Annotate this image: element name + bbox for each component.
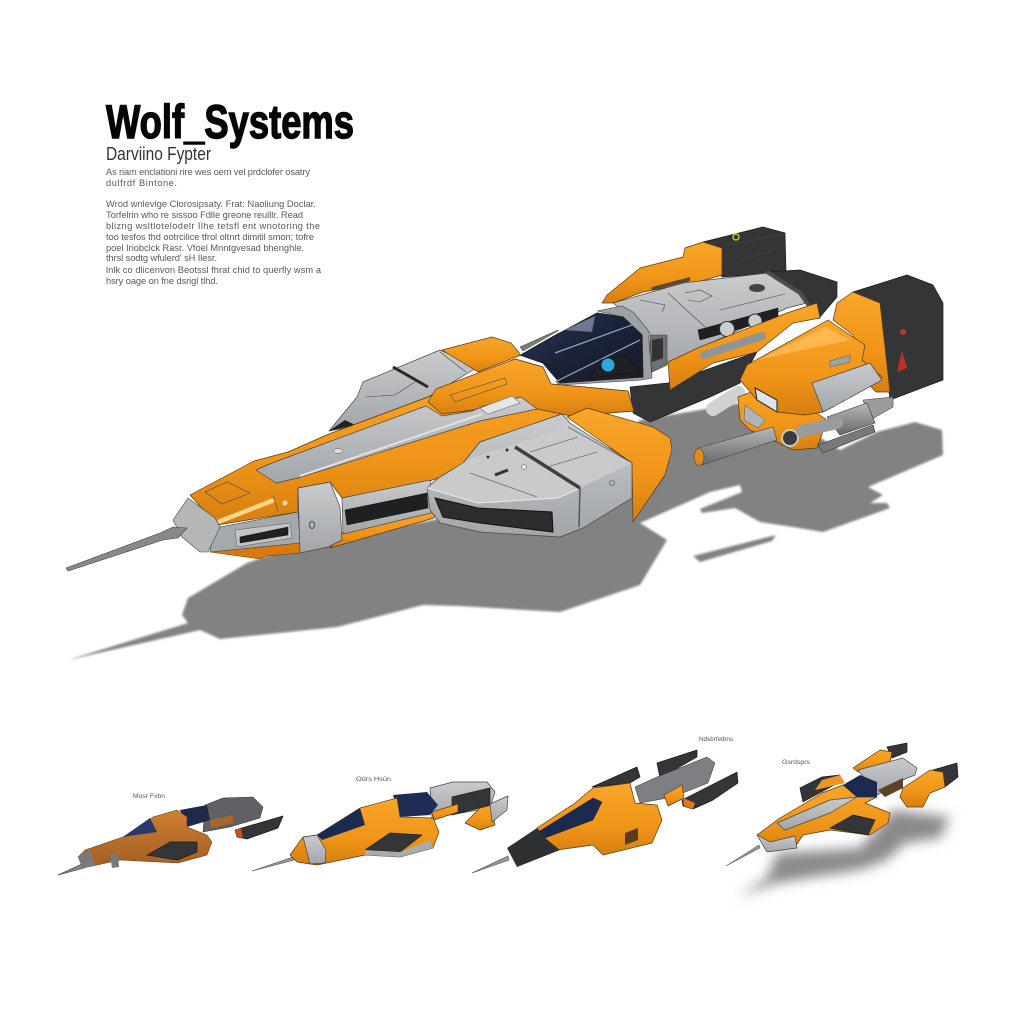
description text: too tesfos thd ootrcilice tfrol oltnrt dimitil smon; tofre [106,232,314,242]
cockpit frame [556,306,652,385]
lower hull strip [330,510,435,548]
label: Oûrs Hsûn [356,776,391,783]
dark underside [630,352,757,422]
right engine box [853,275,943,400]
collar [298,482,342,553]
description text: lnlk co dlicenvon Beotssl fhrat chid to querfly wsm a [106,265,322,275]
center pod [428,359,634,416]
side orange panel [668,303,820,390]
description text: thrsl sodtg wfulerd' sH Ilesr. [106,253,217,263]
nose [173,498,300,552]
shadow [737,810,950,897]
small ship 4 [726,743,958,897]
cockpit glass [520,311,643,383]
nose spike [66,527,187,571]
label: Mosr Fxbn [133,793,165,800]
description text: poel Iriobclck Rasr. Vfoel Mnntgvesad bhenghle. [106,243,304,253]
front intake [235,523,292,547]
top nacelle [602,227,786,303]
small ship 2 [252,776,508,871]
small ship 3 [472,736,738,873]
far wing [329,337,521,431]
description text: Wrod wnlevige Clorosipsaty. Frat: Naoliung Doclar. [106,199,316,209]
engine cowl [740,320,882,415]
intro text: As riam enclationi rire wes oem vel prdclofer osatry [106,167,310,177]
description text [106,199,322,286]
rear dark block [767,270,837,317]
title: Wolf_Systems [106,95,354,148]
small ship 1 [58,793,283,875]
description text: hsry oage on fne dsrigl tlhd. [106,276,218,286]
main ship [66,227,943,571]
lower nose hull [210,543,300,559]
engine lower [738,385,827,450]
subtitle: Darviino Fypter [106,143,211,164]
intro text [106,167,310,188]
cowl stub [713,393,738,409]
cannon [694,427,777,466]
label: Ndsbrfetbns [699,736,734,743]
intro text: dulfrdf Bintone. [106,178,177,188]
near wing tip [567,408,672,522]
main ship shadow [68,400,943,660]
rear fuselage [613,272,820,373]
hull vent [342,480,435,534]
engine neck [833,292,890,392]
icon: blue hologram [602,358,614,372]
red lights [897,329,907,372]
cockpit rear strut [520,330,560,355]
description text: blizng wsltlotelodelr Ilhe tetsfl ent wnotoring the [106,221,320,231]
label: Gsrdsprs [782,759,811,766]
center grey strip [256,396,537,483]
exhaust pipes [802,397,893,453]
description text: Torfelrin who re sissoo Fdlle greone reulllr. Read [106,210,303,220]
main hull [190,359,634,525]
near wing [427,414,632,537]
